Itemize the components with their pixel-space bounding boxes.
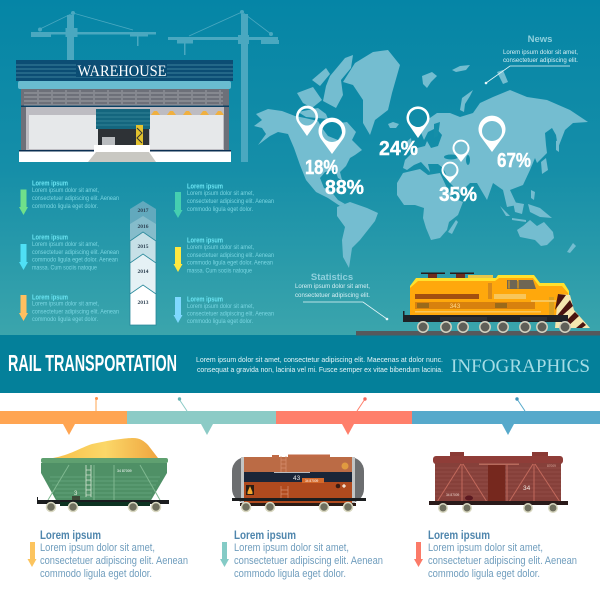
caption 1: consectetuer adipiscing elit. Aenean (40, 555, 188, 567)
white lower panel (0, 393, 600, 600)
tank wagon: 34 87009 (305, 479, 319, 483)
warehouse (16, 60, 233, 162)
right item 2: Lorem ipsum (187, 236, 223, 244)
right item 2: massa. Cum sociis natoque (187, 268, 252, 274)
caption 2: Lorem ipsum dolor sit amet, (234, 542, 349, 554)
caption 3: Lorem ipsum (428, 530, 490, 542)
caption 1: Lorem ipsum (40, 530, 101, 542)
right item 2 (174, 236, 274, 274)
right item 1: Lorem ipsum (187, 182, 223, 190)
banner paragraph: consequat a gravida non, lacinia vel mi. Fusce semper ex vitae bibendum lacinia. (197, 365, 443, 374)
right item 2: consectetuer adipiscing elit. Aenean (187, 252, 274, 259)
box wagon: 34 (523, 485, 531, 492)
banner band (0, 335, 600, 393)
world map (254, 50, 588, 268)
right item 3: consectetuer adipiscing elit. Aenean (187, 310, 274, 318)
statistics callout: consectetuer adipiscing elit. (295, 292, 370, 299)
map percentages: 67% (497, 150, 531, 172)
hopper wagon: 34 87009 (117, 469, 132, 473)
caption 1: Lorem ipsum dolor sit amet, (40, 542, 155, 554)
rail track (356, 331, 600, 336)
news callout: News (528, 34, 552, 45)
left item 1 (19, 178, 119, 215)
right item 3: Lorem ipsum dolor sit amet, (187, 303, 254, 310)
statistics callout (295, 272, 388, 320)
banner infographics label: INFOGRAPHICS (451, 356, 590, 377)
year chevron tower (130, 201, 156, 325)
year chevron tower: 2013 (138, 300, 149, 306)
map percentages: 88% (325, 177, 364, 199)
left item 2: Lorem ipsum dolor sit amet, (32, 241, 99, 248)
statistics callout: Lorem ipsum dolor sit amet, (295, 283, 370, 290)
left item 3: Lorem ipsum (32, 292, 68, 302)
map inland waters (434, 122, 470, 165)
right item 1: consectetuer adipiscing elit. Aenean (187, 198, 274, 205)
banner paragraph: Lorem ipsum dolor sit amet, consectetur adipiscing elit. Maecenas at dolor nunc. (196, 355, 443, 364)
caption 2 (220, 530, 383, 580)
warehouse roof sign (16, 60, 233, 81)
banner paragraph (196, 355, 443, 374)
banner title: RAIL TRANSPORTATION (8, 350, 177, 376)
news callout: consectetuer adipiscing elit. (503, 57, 578, 64)
news callout (485, 34, 578, 84)
warehouse lamps (151, 111, 224, 115)
tank wagon: 43 (293, 475, 301, 482)
news callout: Lorem ipsum dolor sit amet, (503, 49, 578, 56)
caption 3: commodo ligula eget dolor. (428, 568, 540, 580)
right text column (174, 182, 274, 325)
map percentages: 24% (379, 138, 418, 160)
crane right (168, 10, 279, 162)
tank wagon (232, 454, 366, 512)
locomotive: 343 (450, 303, 461, 310)
left item 2: commodo ligula eget dolor. Aenean (32, 256, 118, 264)
left item 2: consectetuer adipiscing elit. Aenean (32, 249, 119, 256)
caption 1 (28, 530, 188, 580)
sand load (53, 438, 158, 458)
left item 3: consectetuer adipiscing elit. Aenean (32, 308, 119, 316)
hopper wagon (37, 438, 169, 512)
locomotive wheels (418, 322, 570, 332)
caption 2: consectetuer adipiscing elit. Aenean (234, 555, 383, 567)
pantographs (421, 272, 493, 278)
map pins (296, 106, 506, 183)
left item 1: Lorem ipsum (32, 178, 68, 188)
caption 3 (414, 530, 577, 580)
right item 3: Lorem ipsum (187, 294, 223, 304)
right item 1: Lorem ipsum dolor sit amet, (187, 190, 254, 197)
right item 3: commodo ligula eget dolor. (187, 318, 253, 325)
background panel (0, 0, 600, 336)
caption 3: consectetuer adipiscing elit. Aenean (428, 555, 577, 567)
left item 3: Lorem ipsum dolor sit amet, (32, 300, 99, 308)
map percentages: 35% (439, 184, 477, 206)
hopper wagon: 3 (74, 491, 78, 497)
right item 2: commodo ligula eget dolor. Aenean (187, 260, 273, 266)
map percentages: 18% (305, 157, 338, 179)
left text column (19, 178, 119, 323)
year chevron tower: 2014 (138, 269, 149, 275)
caption 2: Lorem ipsum (234, 530, 296, 542)
year chevron tower: 2015 (138, 244, 149, 250)
crane left (31, 11, 156, 60)
caption 3: Lorem ipsum dolor sit amet, (428, 542, 543, 554)
snow plow (555, 294, 590, 328)
caption 1: commodo ligula eget dolor. (40, 568, 152, 580)
left item 2 (19, 232, 119, 272)
left item 3: commodo ligula eget dolor. (32, 316, 98, 323)
year chevron tower: 2016 (138, 224, 149, 230)
timeline bar (0, 397, 600, 435)
right item 2: Lorem ipsum dolor sit amet, (187, 244, 254, 251)
caption 2: commodo ligula eget dolor. (234, 568, 346, 580)
map percentages (305, 138, 531, 206)
right item 1: commodo ligula eget dolor. (187, 206, 253, 213)
statistics callout: Statistics (311, 272, 353, 283)
locomotive (403, 272, 590, 332)
box wagon: 87009 (547, 464, 556, 468)
left item 3 (19, 292, 119, 323)
left item 1: Lorem ipsum dolor sit amet, (32, 187, 99, 194)
warehouse roof sign: WAREHOUSE (78, 63, 166, 80)
year chevron tower: 2017 (138, 208, 149, 214)
right item 3 (174, 294, 274, 325)
left item 2: massa. Cum sociis natoque (32, 264, 97, 272)
left item 2: Lorem ipsum (32, 232, 68, 242)
box wagon (429, 452, 568, 512)
left item 1: consectetuer adipiscing elit. Aenean (32, 195, 119, 202)
left item 1: commodo ligula eget dolor. (32, 203, 98, 210)
box wagon: 34 87009 (446, 493, 460, 497)
right item 1 (174, 182, 274, 218)
